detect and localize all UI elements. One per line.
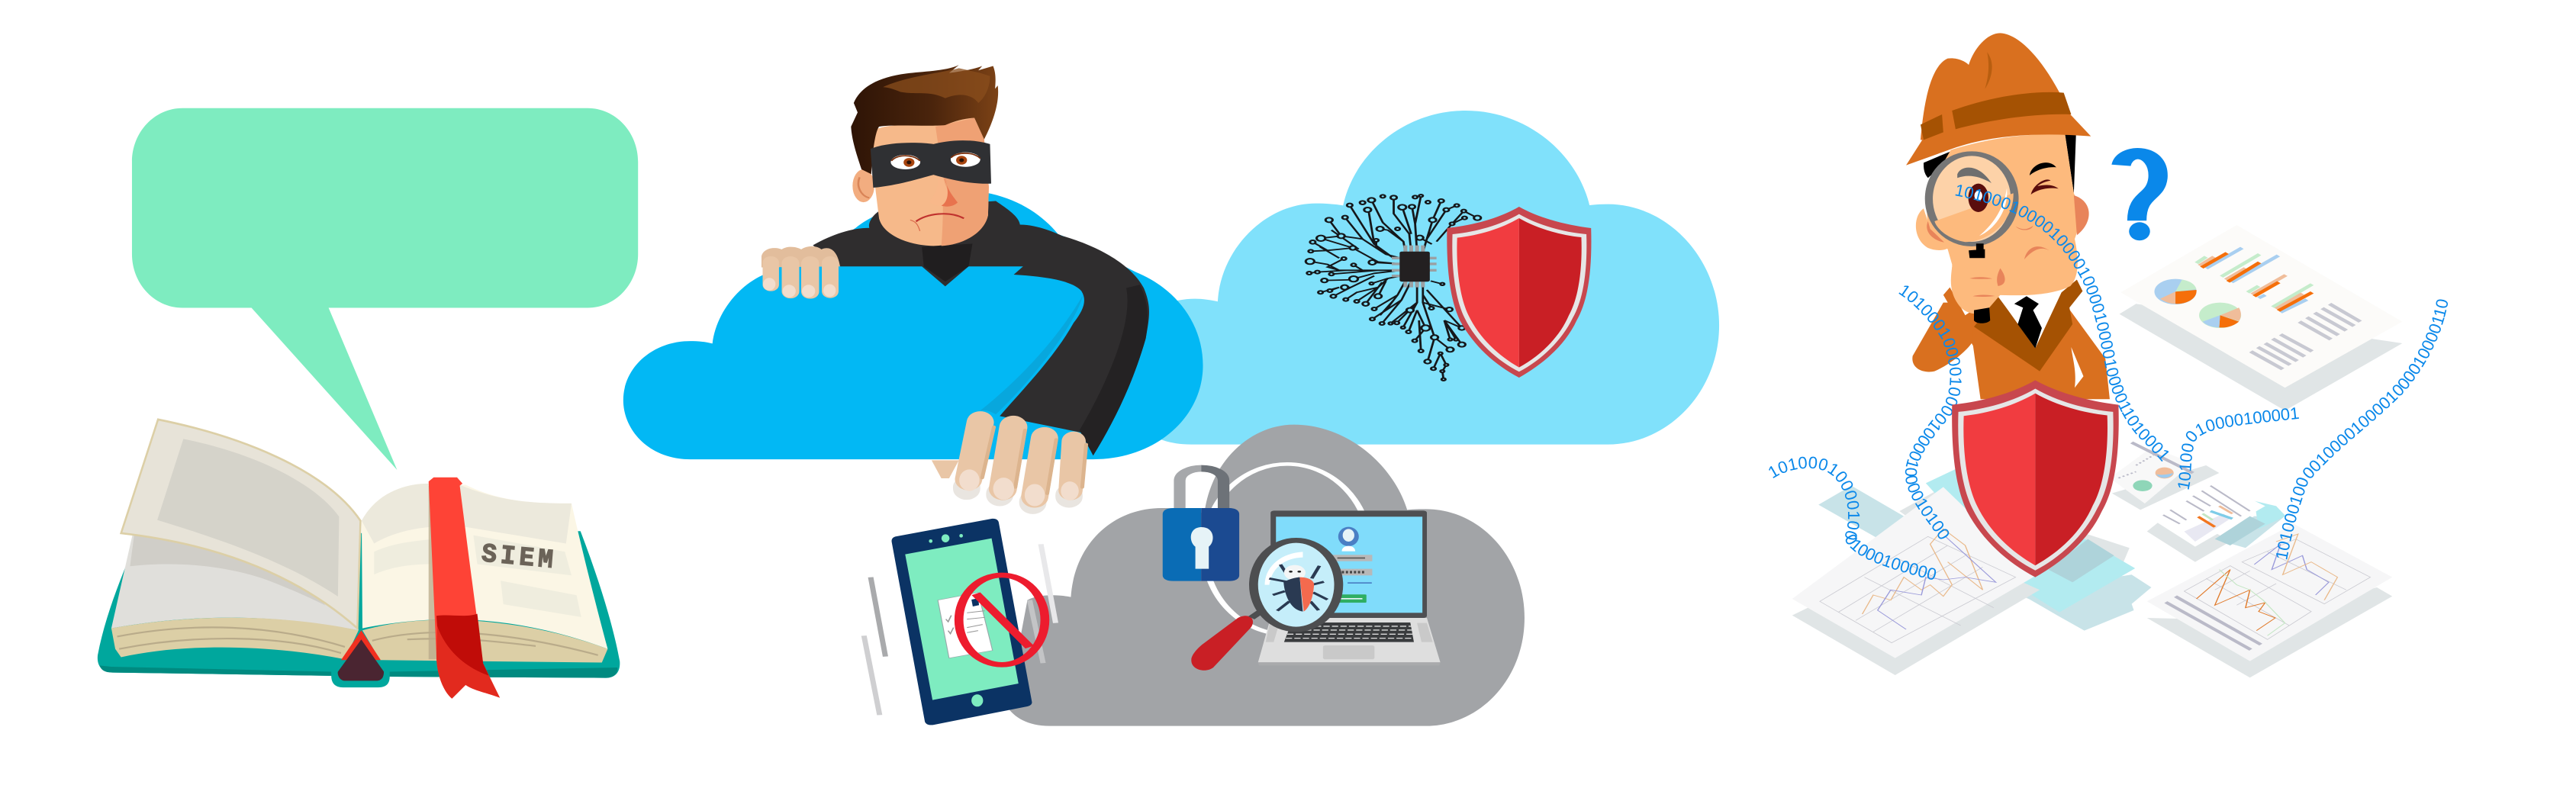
small pie sheet <box>2110 442 2219 510</box>
light cloud <box>1145 111 1719 445</box>
binary stream 5: 10100010000100001000010000100001101000100 <box>2276 299 2448 560</box>
login form <box>1328 527 1372 603</box>
book spine tab <box>338 630 384 680</box>
question mark <box>2121 153 2158 240</box>
hooded thief on dark blue cloud <box>623 65 1203 506</box>
laptop <box>1258 510 1441 665</box>
red shield <box>1447 207 1591 378</box>
binary stream 3: 101000100001000100010000001 <box>1769 456 1937 580</box>
small text sheet <box>2147 481 2286 562</box>
grey cloud <box>1007 425 1525 726</box>
detective head <box>1916 134 2089 314</box>
hair <box>851 65 998 174</box>
right hand <box>932 423 1086 506</box>
large red shield <box>1952 380 2119 577</box>
speech bubble <box>132 108 638 470</box>
teal panels <box>1818 467 2151 631</box>
circuit brain <box>1306 195 1481 381</box>
speech bubble and open SIEM book <box>98 108 638 699</box>
page blocks <box>111 618 359 659</box>
light blue cloud with circuit brain and shield <box>1145 111 1719 445</box>
red ribbon bookmark <box>429 478 500 699</box>
binary stream 2: 1010001000010000100001000010100 <box>1898 285 1962 539</box>
eye mask <box>871 140 991 188</box>
thief body and arm <box>813 201 1149 455</box>
isometric report documents <box>1792 442 2392 677</box>
padlock <box>1163 468 1239 581</box>
book cover <box>98 531 620 687</box>
right page <box>362 484 607 649</box>
tablet with prohibition sign <box>864 519 1055 725</box>
magnifying lens <box>1929 153 2014 323</box>
flipping page <box>121 420 360 629</box>
detective hat <box>1906 33 2091 166</box>
left hand <box>762 246 840 299</box>
lower left page <box>111 525 359 630</box>
magnifying glass with bug <box>1191 540 1338 671</box>
bug <box>1269 565 1328 612</box>
white ring <box>1204 464 1370 635</box>
dark blue cloud <box>623 193 1203 459</box>
shirt and tie <box>1996 292 2046 349</box>
SIEM label: SIEM <box>481 540 558 577</box>
ear <box>852 169 874 202</box>
chart sheet left <box>1792 487 2040 675</box>
face <box>873 117 989 246</box>
report sheet with charts <box>2120 225 2402 410</box>
coat <box>1912 280 2110 399</box>
binary data streams <box>1769 185 2448 580</box>
detective with magnifying glass <box>1906 33 2402 410</box>
chart sheet right <box>2147 524 2392 677</box>
grey cloud with phone, lock, laptop and bug <box>864 425 1525 726</box>
